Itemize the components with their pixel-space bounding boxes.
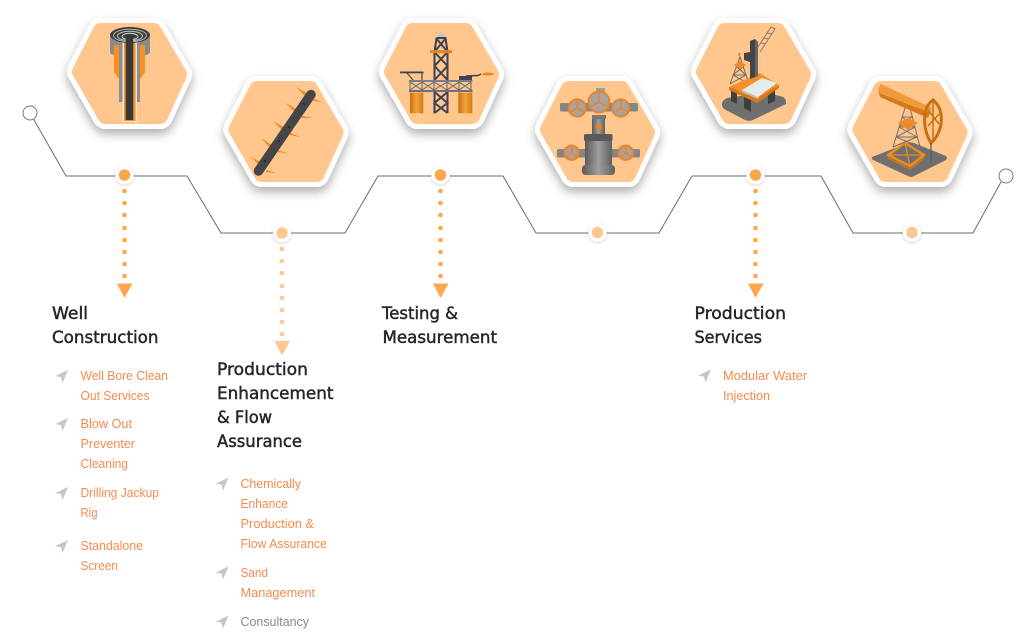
item: Modular Water Injection <box>698 368 808 403</box>
heading: Production Enhancement & Flow Assurance: Production <box>217 360 308 379</box>
hexagon 6: pump jack icon <box>860 84 960 177</box>
item: Chemically Enhance Production & Flow Assurance: Enhance <box>240 496 288 511</box>
heading: Production Services: Services <box>694 328 762 347</box>
item: Standalone Screen: Screen <box>80 558 118 573</box>
hexagon 5: production services icon <box>704 27 803 121</box>
timeline node 2 <box>274 226 290 240</box>
item: Sand Management <box>216 565 315 600</box>
timeline path <box>23 106 1013 233</box>
dotted arrow 2 <box>274 247 290 356</box>
list: well construction services <box>55 368 168 573</box>
list: production enhancement services <box>216 476 327 629</box>
timeline node 5 <box>748 168 763 182</box>
heading: Production Enhancement & Flow Assurance: & Flow <box>217 408 272 427</box>
item: Blow Out Preventer Cleaning <box>55 416 136 471</box>
timeline node 3 <box>433 168 448 182</box>
item: Modular Water Injection: Injection <box>723 388 770 403</box>
heading: Production Services: Production <box>694 304 786 323</box>
heading: Production Enhancement & Flow Assurance: Assurance <box>217 432 302 451</box>
dotted arrow 1 <box>117 189 132 298</box>
item: Chemically Enhance Production & Flow Assurance: Production & <box>240 516 314 531</box>
item: Standalone Screen <box>55 538 143 573</box>
heading: Well Construction: Well <box>52 304 88 323</box>
item: Chemically Enhance Production & Flow Assurance: Chemically <box>240 476 302 491</box>
item: Consultancy: Consultancy <box>240 614 310 629</box>
item: Chemically Enhance Production & Flow Assurance <box>216 476 327 551</box>
item: Chemically Enhance Production & Flow Assurance: Flow Assurance <box>240 536 327 551</box>
item: Standalone Screen: Standalone <box>80 538 143 553</box>
hexagon 1: well construction icon <box>80 27 179 122</box>
item: Well Bore Clean Out Services <box>55 368 168 403</box>
item: Drilling Jackup Rig: Rig <box>80 505 98 520</box>
heading: Well Construction: Construction <box>52 328 158 347</box>
item: Sand Management: Management <box>240 585 315 600</box>
heading: Production Enhancement & Flow Assurance: Enhancement <box>217 384 334 403</box>
dotted arrow 3 <box>433 189 448 298</box>
timeline node 6 <box>904 225 920 240</box>
hexagon 3: testing and measurement icon <box>392 31 495 116</box>
item: Blow Out Preventer Cleaning: Blow Out <box>80 416 132 431</box>
item: Well Bore Clean Out Services: Out Services <box>80 388 150 403</box>
item: Blow Out Preventer Cleaning: Preventer <box>80 436 136 451</box>
heading: Testing & Measurement: Measurement <box>382 328 498 347</box>
timeline end node <box>999 169 1013 183</box>
item: Well Bore Clean Out Services: Well Bore Clean <box>80 368 168 383</box>
item: Drilling Jackup Rig <box>55 485 159 520</box>
item: Modular Water Injection: Modular Water <box>723 368 808 383</box>
item: Sand Management: Sand <box>240 565 268 580</box>
heading: Testing & Measurement: Testing & <box>381 304 458 323</box>
dotted arrow 4 <box>748 189 764 298</box>
timeline node 1 <box>117 168 132 182</box>
timeline start node <box>23 106 37 120</box>
item: Drilling Jackup Rig: Drilling Jackup <box>80 485 159 500</box>
timeline node 4 <box>590 225 605 240</box>
item: Blow Out Preventer Cleaning: Cleaning <box>80 456 128 471</box>
hexagon 2: production enhancement icon <box>236 87 336 174</box>
hexagon 4: wellhead icon <box>548 88 647 175</box>
